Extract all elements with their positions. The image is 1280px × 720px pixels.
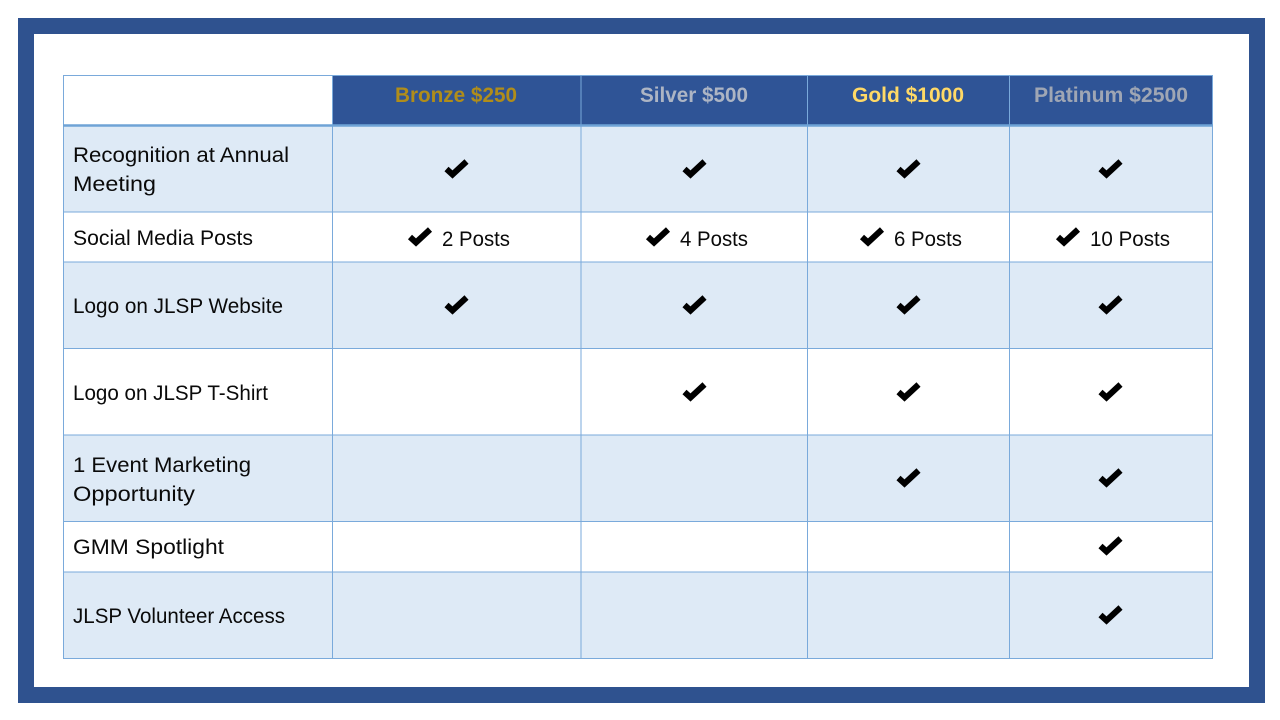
- row: Social Media Posts: [73, 226, 1170, 251]
- row: Social Media Posts: 2 Posts: [442, 227, 510, 251]
- row: 1 Event Marketing Opportunity: Opportunity: [73, 482, 195, 506]
- row: Social Media Posts: Social Media Posts: [73, 226, 253, 250]
- sponsorship table: [63, 76, 1213, 658]
- row: JLSP Volunteer Access: [63, 572, 1213, 658]
- row: Social Media Posts: 10 Posts: [1090, 227, 1170, 251]
- row: Recognition at Annual Meeting: Recognition at Annual: [73, 143, 289, 167]
- row: 1 Event Marketing Opportunity: 1 Event Marketing: [73, 453, 251, 477]
- tier: silver: Silver $500: [640, 84, 748, 107]
- row: GMM Spotlight: [73, 535, 1120, 559]
- tier: gold: Gold $1000: [852, 84, 964, 107]
- tier: platinum: Platinum $2500: [1034, 84, 1188, 107]
- row: 1 Event Marketing Opportunity: [63, 435, 1213, 521]
- row: Logo on JLSP Website: [63, 262, 1213, 348]
- header row: [333, 76, 1212, 125]
- row: GMM Spotlight: GMM Spotlight: [73, 535, 224, 559]
- row: Recognition at Annual Meeting: [63, 126, 1213, 212]
- row: Social Media Posts: 4 Posts: [680, 227, 748, 251]
- row: Social Media Posts: 6 Posts: [894, 227, 962, 251]
- tier: bronze: Bronze $250: [395, 84, 517, 107]
- row: Logo on JLSP T-Shirt: [73, 381, 1120, 405]
- row: Logo on JLSP T-Shirt: Logo on JLSP T-Shirt: [73, 381, 268, 405]
- row: Recognition at Annual Meeting: Meeting: [73, 172, 156, 196]
- row: JLSP Volunteer Access: JLSP Volunteer Access: [73, 604, 285, 628]
- row: Logo on JLSP Website: Logo on JLSP Website: [73, 294, 283, 318]
